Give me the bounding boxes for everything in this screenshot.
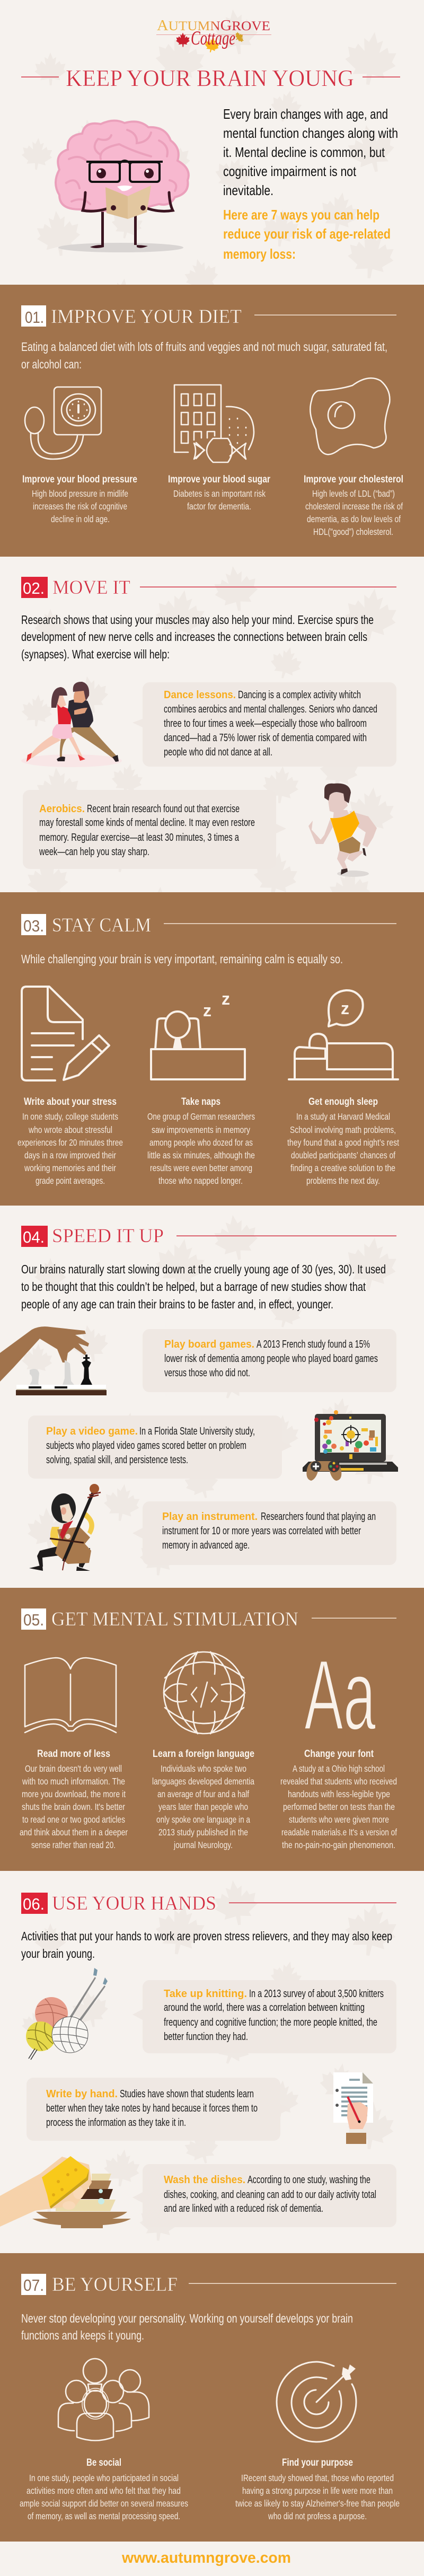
item: get enough sleep: Get enough sleep <box>308 1096 378 1107</box>
callout: knitting: Take up knitting. <box>164 1988 247 2000</box>
item: learn a foreign language: Individuals who spoke two <box>161 1763 246 1774</box>
callout: video game: solving, spatial skill, and persistence tests. <box>46 1454 188 1466</box>
icon: chocolate and candy <box>174 385 254 462</box>
icon: napping at desk: z <box>203 1001 211 1020</box>
callout: wash the dishes: Wash the dishes. <box>164 2174 245 2186</box>
callout: play an instrument: memory in advanced age. <box>162 1540 250 1551</box>
illustration: runner <box>308 784 377 877</box>
icon: globe with code symbol <box>164 1652 245 1734</box>
callout: aerobics: memory. Regular exercise—at least 30 minutes, 3 times a <box>39 832 240 843</box>
callout: play an instrument <box>132 1501 396 1565</box>
item: find your purpose <box>235 2457 400 2521</box>
item: take naps: One group of German researchers <box>147 1111 255 1122</box>
icon: brain character reading <box>56 120 189 252</box>
intro highlight: reduce your risk of age-related <box>223 226 391 242</box>
heading 05: GET MENTAL STIMULATION <box>51 1608 298 1630</box>
item: change your font: A study at a Ohio high school <box>293 1763 385 1774</box>
heading 02: 02. <box>23 579 45 597</box>
callout: dance lessons: Dance lessons. <box>164 689 236 701</box>
item: change your font <box>280 1748 397 1850</box>
item: cholesterol: HDL("good”) cholesterol. <box>313 526 393 537</box>
item: be social: In one study, people who participated in social <box>29 2473 179 2483</box>
item: cholesterol: Improve your cholesterol <box>304 474 403 485</box>
item: get enough sleep: School involving math problems, <box>290 1124 396 1135</box>
callout: aerobics: Aerobics. <box>39 803 85 815</box>
item: be social: activities more often and who felt that they had <box>26 2485 181 2496</box>
paragraph: (synapses). What exercise will help: <box>21 647 170 661</box>
panel: header intro <box>21 10 400 285</box>
item: take naps: saw improvements in memory <box>152 1124 250 1135</box>
item: change your font: performed better on tests than the <box>283 1801 395 1812</box>
icon: target with arrow <box>277 2362 356 2442</box>
item: get enough sleep <box>287 1096 399 1186</box>
intro text <box>223 106 398 198</box>
item: blood sugar: Diabetes is an important risk <box>173 488 266 499</box>
item: get enough sleep: doubled participants’ chances of <box>291 1150 395 1160</box>
callout: write by hand: process the information as they take it in. <box>46 2117 186 2129</box>
item: learn a foreign language: journal Neurology. <box>173 1840 233 1850</box>
icon: sleeping in bed <box>289 990 398 1079</box>
paragraph: your brain young. <box>21 1947 95 1960</box>
callout: dance lessons <box>132 682 396 767</box>
item: blood sugar: Improve your blood sugar <box>168 474 270 485</box>
heading 04 <box>21 1225 396 1247</box>
icon: sleeping in bed: z <box>341 999 349 1018</box>
callout: board games: versus those who did not. <box>164 1367 250 1379</box>
item: read more of less: sense rather than read 20. <box>31 1840 116 1850</box>
callout: knitting: better function they had. <box>164 2031 248 2043</box>
item: write about your stress: grade point averages. <box>36 1175 105 1186</box>
item: change your font: students who were given more <box>289 1814 389 1825</box>
item: read more of less: more you download, the more it <box>22 1789 126 1799</box>
item: cholesterol: dementia, as do low levels of <box>307 514 401 524</box>
item: take naps: among people who dozed for as <box>149 1137 253 1148</box>
item: read more of less: shuts the brain down. It's better <box>22 1801 125 1812</box>
heading 05 <box>21 1608 396 1630</box>
item: get enough sleep: In a study at Harvard Medical <box>296 1111 390 1122</box>
heading 01 <box>21 305 396 328</box>
heading 03: 03. <box>23 917 44 935</box>
item: be social: Be social <box>86 2457 121 2468</box>
item: write about your stress: who wrote about stressful <box>28 1124 112 1135</box>
callout: play an instrument: Researchers found that playing an <box>261 1511 376 1523</box>
item: learn a foreign language: an average of four and a half <box>157 1789 249 1799</box>
intro text: inevitable. <box>223 182 273 198</box>
illustration: hand writing on paper <box>333 2072 373 2144</box>
item: blood pressure: High blood pressure in midlife <box>32 488 128 499</box>
callout: write by hand <box>26 2078 290 2141</box>
heading 06: 06. <box>23 1895 45 1913</box>
item: be social: ample social support did better on several measures <box>20 2498 188 2509</box>
item: read more of less <box>20 1748 128 1850</box>
callout: board games: Play board games. <box>164 1338 254 1350</box>
item: find your purpose: Find your purpose <box>282 2457 353 2468</box>
heading 01: IMPROVE YOUR DIET <box>51 306 242 328</box>
illustration: cello player <box>29 1484 101 1571</box>
item: read more of less: and think about them in a deeper <box>20 1827 128 1838</box>
item: take naps: those who napped longer. <box>158 1175 243 1186</box>
item: blood pressure <box>22 474 137 524</box>
intro text: cognitive impairment is not <box>223 163 357 179</box>
icon: open book <box>25 1658 116 1733</box>
intro highlight: Here are 7 ways you can help <box>223 207 379 223</box>
panel: 06 use your hands <box>0 1877 400 2242</box>
intro highlight: memory loss: <box>223 246 296 262</box>
paragraph: functions and keeps it young. <box>21 2328 144 2342</box>
icon: blood pressure monitor <box>25 387 101 459</box>
item: cholesterol <box>304 474 403 537</box>
paragraph <box>21 2311 353 2342</box>
item: blood pressure: increases the risk of cognitive <box>33 501 127 512</box>
icon: Aa font: Aa <box>304 1639 376 1751</box>
callout: video game <box>28 1416 292 1479</box>
panel: 05 get mental stimulation <box>0 1588 424 1871</box>
item: get enough sleep: finding a creative solution to the <box>290 1163 395 1173</box>
callout: aerobics <box>23 790 286 869</box>
heading 06 <box>21 1893 396 1914</box>
title: KEEP YOUR BRAIN YOUNG <box>66 65 354 91</box>
panel: 02 move it <box>21 566 396 892</box>
callout: write by hand: Studies have shown that students learn <box>120 2088 254 2100</box>
callout: aerobics: Recent brain research found out that exercise <box>87 803 240 815</box>
item: cholesterol: High levels of LDL (“bad”) <box>312 488 395 499</box>
item: blood pressure: decline in old age. <box>51 514 110 524</box>
heading 03: STAY CALM <box>52 915 151 936</box>
icon: group of people <box>58 2359 149 2441</box>
item: learn a foreign language <box>152 1748 254 1850</box>
footer url <box>0 2542 424 2576</box>
callout: video game: In a Florida State University study, <box>139 1426 255 1437</box>
heading 06: USE YOUR HANDS <box>52 1893 216 1914</box>
item: blood sugar: factor for dementia. <box>187 501 251 512</box>
item: take naps: little as six minutes, although the <box>147 1150 255 1160</box>
item: write about your stress: Write about your stress <box>24 1096 117 1107</box>
intro text: it. Mental decline is common, but <box>223 144 385 160</box>
logo: Cottage <box>191 28 235 49</box>
paragraph <box>21 613 374 661</box>
callout: aerobics: may forestall some kinds of mental decline. It may even restore <box>39 817 255 829</box>
item: blood pressure: Improve your blood pressure <box>22 474 137 485</box>
heading 02 <box>21 577 396 599</box>
callout: dance lessons: Dancing is a complex activity whitch <box>238 689 361 701</box>
callout: knitting <box>132 1980 396 2053</box>
illustration: laptop and game controller <box>303 1410 398 1481</box>
illustration: hand playing chess <box>0 1326 107 1395</box>
item: get enough sleep: they found that a good night’s rest <box>287 1137 399 1148</box>
heading 07 <box>21 2274 396 2296</box>
callout: write by hand: better when they take notes by hand because it forces them to <box>46 2103 258 2114</box>
heading 05: 05. <box>23 1611 44 1629</box>
footer url: www.autumngrove.com <box>121 2549 291 2566</box>
callout: board games: A 2013 French study found a 15% <box>257 1339 370 1350</box>
panel: 01 improve your diet <box>0 285 424 557</box>
paragraph <box>21 340 387 371</box>
item: change your font: Change your font <box>304 1748 374 1760</box>
callout: board games <box>143 1329 396 1392</box>
item: write about your stress: days in a row improved their <box>24 1150 116 1160</box>
panel: 04 speed it up <box>0 1212 400 1577</box>
logo <box>156 17 271 54</box>
item: write about your stress: In one study, college students <box>22 1111 118 1122</box>
paragraph: people of any age can train their brains to be faster and, in effect, younger. <box>21 1297 333 1311</box>
illustration: washing dishes with sponge <box>0 2156 131 2228</box>
panel: 07 be yourself <box>0 2253 424 2542</box>
heading 01: 01. <box>25 308 44 327</box>
item: read more of less: Our brain doesn't do very well <box>25 1763 122 1774</box>
item: write about your stress: experiences for 20 minutes three <box>17 1137 123 1148</box>
heading 04: SPEED IT UP <box>52 1225 164 1247</box>
icon: document and pencil <box>22 987 109 1080</box>
callout: video game: subjects who played video games scored better on problem <box>46 1440 246 1452</box>
callout: wash the dishes: and are linked with a reduced risk of dementia. <box>164 2203 323 2214</box>
callout: wash the dishes <box>132 2164 396 2227</box>
item: learn a foreign language: years later than people who <box>158 1801 248 1812</box>
illustration: dancing couple <box>21 682 122 767</box>
item: write about your stress: working memories and their <box>24 1163 116 1173</box>
callout: video game: Play a video game. <box>46 1425 138 1437</box>
paragraph <box>21 1929 392 1960</box>
callout: wash the dishes: According to one study, washing the <box>248 2174 370 2186</box>
item: learn a foreign language: only spoke one language in a <box>156 1814 250 1825</box>
callout: dance lessons: people who did not dance at all. <box>164 746 272 758</box>
item: learn a foreign language: Learn a foreign language <box>153 1748 254 1760</box>
heading 03 <box>21 914 396 936</box>
heading 07: 07. <box>23 2276 44 2294</box>
item: learn a foreign language: 2013 study published in the <box>158 1827 248 1838</box>
item: take naps: Take naps <box>181 1096 220 1107</box>
item: blood sugar <box>168 474 270 512</box>
intro highlight <box>223 207 391 262</box>
callout: write by hand: Write by hand. <box>46 2088 118 2100</box>
item: take naps: results were even better among <box>150 1163 252 1173</box>
item: get enough sleep: problems the next day. <box>306 1175 380 1186</box>
illustration: yarn and knitting needles <box>26 1968 108 2060</box>
item: write about your stress <box>17 1096 123 1186</box>
item: take naps <box>147 1096 255 1186</box>
heading 07: BE YOURSELF <box>52 2274 178 2296</box>
item: read more of less: to read one or two good articles <box>22 1814 125 1825</box>
callout: play an instrument: Play an instrument. <box>162 1510 258 1523</box>
item: read more of less: with too much information. The <box>22 1776 125 1787</box>
item: be social: of memory, as well as mental processing speed. <box>28 2511 180 2521</box>
heading 04: 04. <box>23 1228 45 1246</box>
paragraph: While challenging your brain is very important, remaining calm is equally so. <box>21 952 343 966</box>
icon: napping at desk <box>151 989 245 1079</box>
item: learn a foreign language: languages developed dementia <box>152 1776 254 1787</box>
icon: napping at desk: z <box>222 989 230 1008</box>
callout: aerobics: week—can help you stay sharp. <box>39 846 149 858</box>
item: read more of less: Read more of less <box>37 1748 110 1760</box>
paragraph <box>21 1262 386 1311</box>
paragraph: or alcohol can: <box>21 357 82 371</box>
heading 02: MOVE IT <box>52 577 130 599</box>
panel: 03 stay calm <box>0 892 424 1206</box>
icon: fried egg <box>310 378 390 454</box>
item: find your purpose: who did not profess a purpose. <box>268 2511 367 2521</box>
item: change your font: the no-pain-no-gain phenomenon. <box>282 1840 395 1850</box>
logo: AUTUMNGROVE <box>157 17 270 34</box>
item: change your font: handouts with less-legible type <box>288 1789 390 1799</box>
item: be social <box>20 2457 188 2521</box>
